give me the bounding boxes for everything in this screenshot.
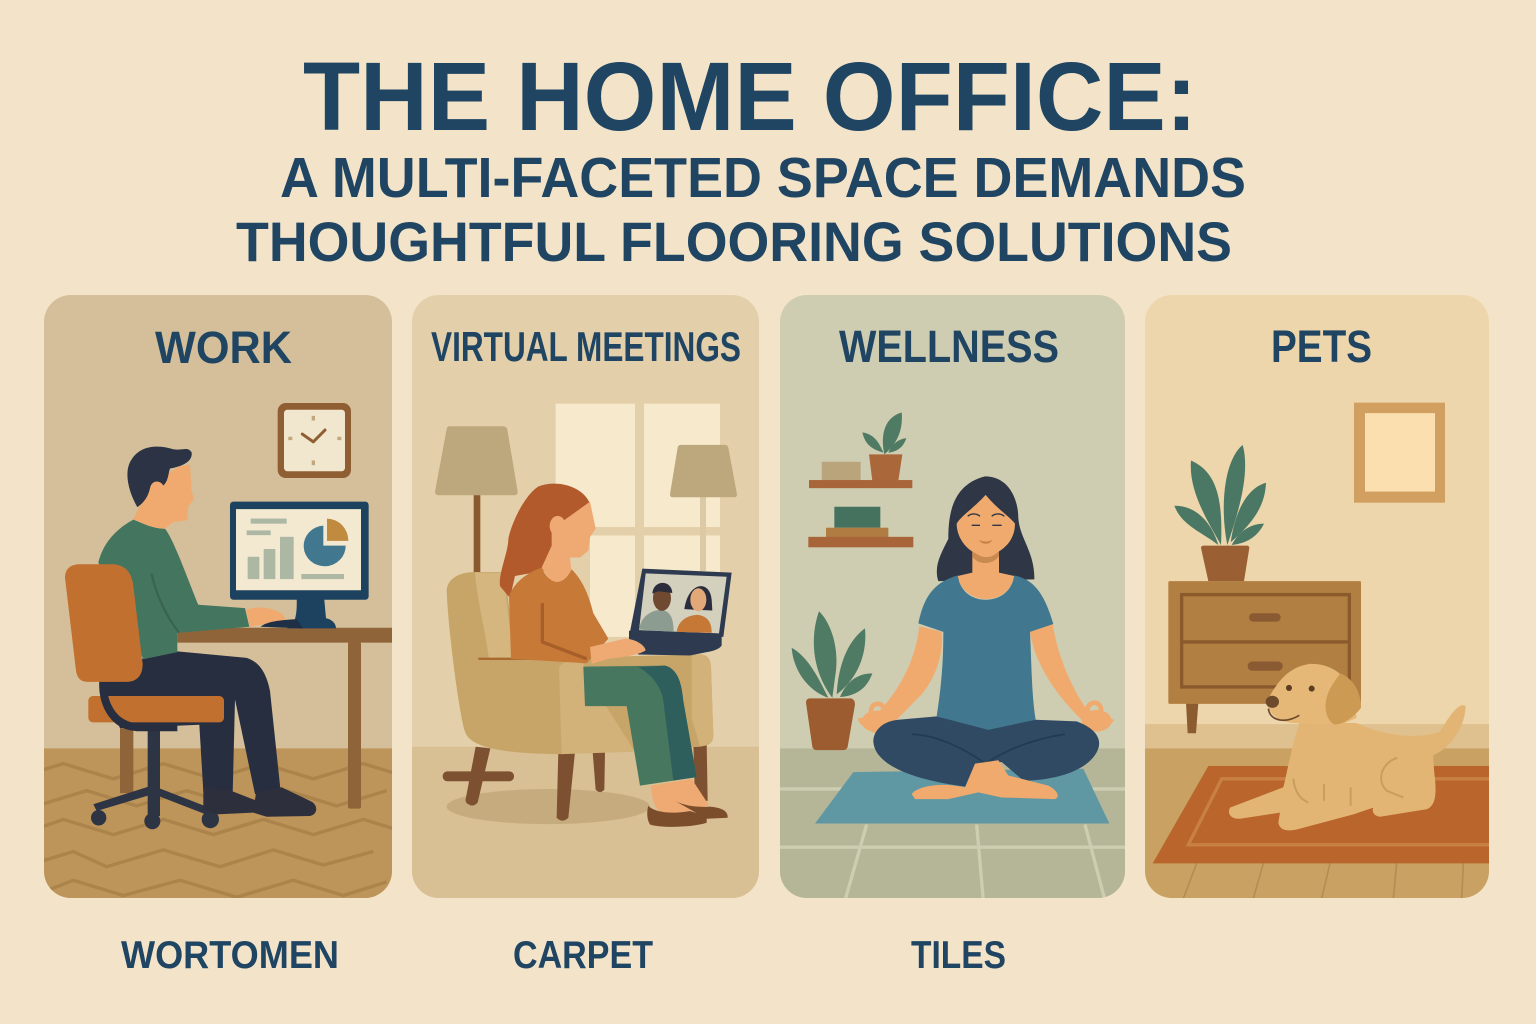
sleeve fold [542,603,587,659]
woman feet [912,760,1058,799]
dog head [1267,664,1357,725]
scene: dog on rug [1140,403,1493,904]
dog fur lines [1293,758,1403,806]
laptop [629,569,732,655]
chair back [65,564,143,682]
sleeve fold [152,574,178,632]
small plant [862,412,906,481]
woman arms and hands [858,624,1114,733]
man head [127,447,194,529]
panel: virtual meetings [405,295,765,906]
scene: woman on video call [405,404,765,906]
heading: virtual meetings: VIRTUAL MEETINGS [431,323,741,370]
panel: work [44,295,392,898]
floor lamp left [435,426,518,574]
floor [405,747,765,906]
dog face [1266,685,1315,720]
floor plant [792,611,872,750]
subtitle line 1: A MULTI-FACETED SPACE DEMANDS [280,146,1246,210]
flooring label: carpet: CARPET [513,934,653,977]
potted plant [1174,445,1266,581]
armchair legs [443,743,708,821]
window [556,404,720,637]
man torso [98,520,249,659]
woman face [957,495,1015,556]
woman hair [937,476,1034,581]
video participant left [639,583,674,632]
flooring label: tiles: TILES [911,934,1006,977]
woman hair [500,484,590,598]
scene: man at desk [44,403,392,898]
woman forearm [590,639,646,664]
man shoes [203,787,316,817]
desk [120,628,392,809]
man trousers [99,651,281,794]
wall shelves [808,462,913,547]
floor lamp right [670,445,737,571]
man hand and mouse [246,607,303,628]
subtitle line 2: THOUGHTFUL FLOORING SOLUTIONS [236,210,1232,273]
woman trousers [873,716,1099,787]
chair shadow [447,789,650,824]
scene: woman meditating [775,412,1135,904]
heading: pets: PETS [1271,321,1372,372]
panel: wellness [775,295,1135,904]
chair seat [88,696,224,722]
yoga mat [815,769,1109,823]
picture frame [1354,403,1445,503]
woman feet and shoes [647,779,728,827]
woman shirt [918,575,1053,732]
dog body [1229,705,1466,830]
heading: work: WORK [155,322,292,373]
video participant right [677,586,712,633]
flooring label: wortomen: WORTOMEN [121,934,339,977]
woman sweater [509,568,608,663]
title [236,42,1246,273]
armchair [447,572,713,754]
rug [1153,766,1490,863]
baseboard and floor [1140,724,1493,904]
computer monitor with charts [230,502,369,628]
wall clock [278,403,351,478]
panel: pets [1140,295,1493,904]
tiled floor [775,748,1135,904]
chair support arc [103,681,177,727]
carpet floor [44,748,392,898]
office chair base [91,726,219,829]
woman neck [958,546,1014,599]
woman head and neck [542,502,596,584]
title line 1: THE HOME OFFICE: [303,42,1197,151]
woman trousers [583,666,697,786]
dog [1229,664,1466,830]
dog ear [1326,673,1361,724]
heading: wellness: WELLNESS [839,321,1059,372]
dresser [1168,581,1361,733]
